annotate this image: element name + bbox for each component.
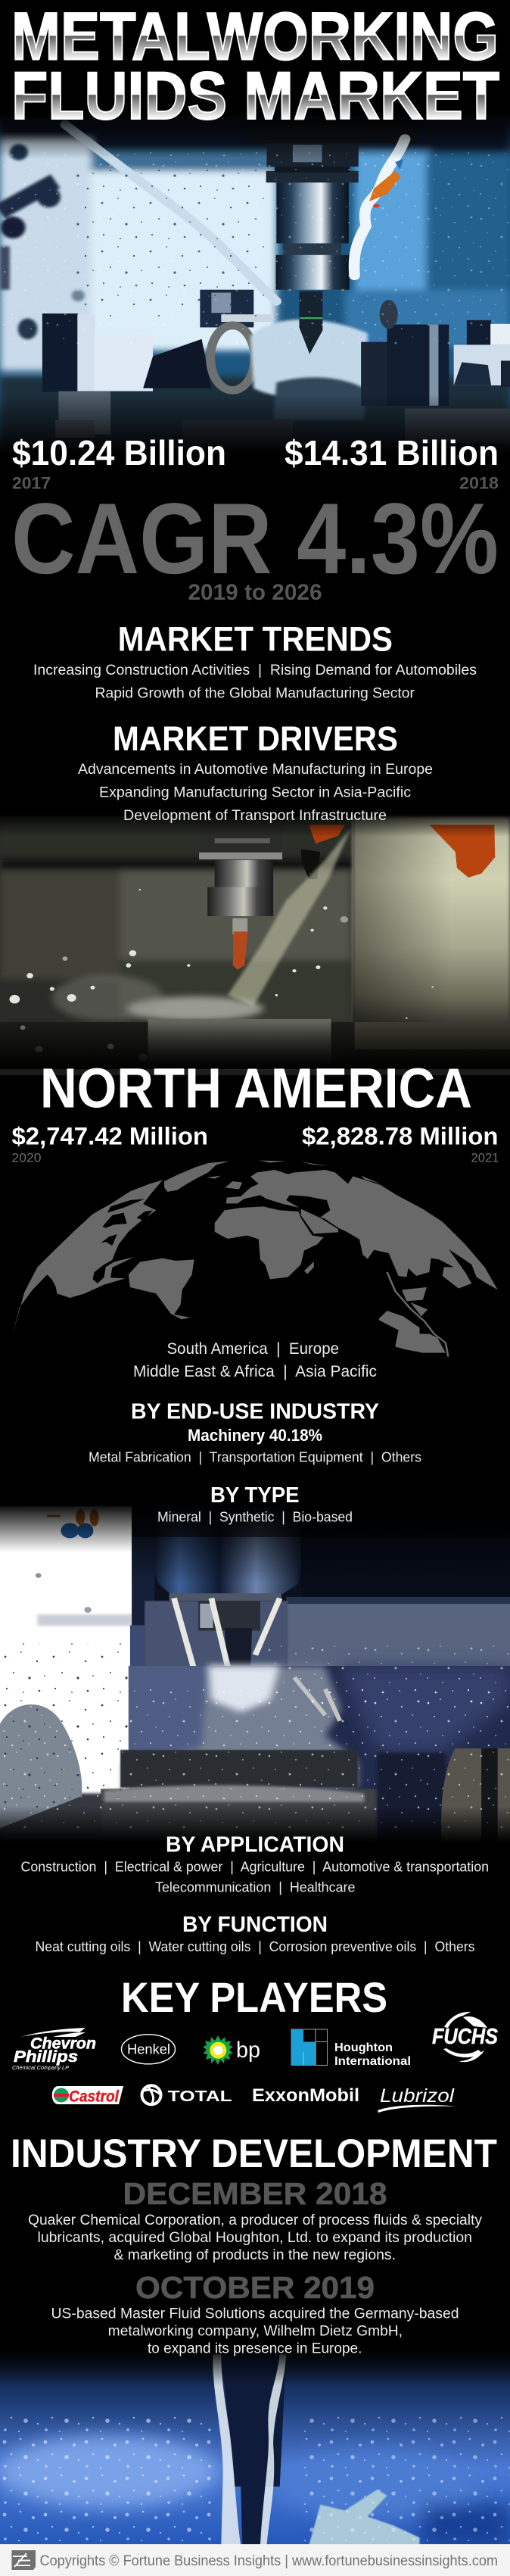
stat: 2017 market size: $10.24 Billion bbox=[12, 433, 226, 472]
title bbox=[11, 0, 499, 133]
logo: Chevron Phillips: Chemical Company LP bbox=[12, 2064, 69, 2071]
development: October 2019: to expand its presence in Europe. bbox=[148, 2341, 362, 2357]
key players heading: KEY PLAYERS bbox=[121, 1973, 387, 2021]
logo: ExxonMobil: ExxonMobil bbox=[252, 2085, 359, 2106]
logo: FUCHS bbox=[432, 2012, 499, 2062]
stat: 2017 market size bbox=[12, 433, 226, 493]
logo: TOTAL: TOTAL bbox=[168, 2088, 232, 2105]
by application: Telecommunication | Healthcare bbox=[155, 1879, 356, 1895]
footer bar bbox=[0, 2544, 510, 2576]
logo: Houghton International: Houghton bbox=[334, 2041, 393, 2054]
development: December 2018 bbox=[28, 2176, 482, 2263]
by type: Mineral | Synthetic | Bio-based bbox=[157, 1510, 353, 1525]
by function: BY FUNCTION bbox=[182, 1913, 328, 1937]
logo: Chevron Phillips: Chevron bbox=[30, 2035, 96, 2053]
market drivers: Expanding Manufacturing Sector in Asia-Pacific bbox=[99, 784, 411, 800]
by end-use industry bbox=[89, 1399, 421, 1464]
development: October 2019 bbox=[51, 2270, 459, 2357]
development: December 2018: Quaker Chemical Corporation, a producer of process fluids & specialty bbox=[28, 2213, 482, 2228]
development: December 2018: lubricants, acquired Global Houghton, Ltd. to expand its production bbox=[38, 2230, 472, 2246]
CAGR figure: 2019 to 2026 bbox=[188, 580, 322, 605]
world map globe bbox=[12, 1161, 498, 1357]
logo: Chevron Phillips: Phillips bbox=[14, 2048, 78, 2066]
by end-use industry: Metal Fabrication | Transportation Equipment | Others bbox=[89, 1449, 421, 1464]
hero photo: milling spindle with coolant in blue tones bbox=[0, 114, 510, 473]
logo: bp bbox=[203, 2035, 260, 2065]
logo: Lubrizol: Lubrizol bbox=[380, 2085, 456, 2107]
by type: BY TYPE bbox=[210, 1483, 300, 1508]
development: December 2018: & marketing of products in the new regions. bbox=[114, 2247, 396, 2263]
market trends: Increasing Construction Activities | Rising Demand for Automobiles bbox=[33, 663, 477, 678]
icon: Fortune Business Insights logo bbox=[12, 2550, 36, 2570]
market trends: MARKET TRENDS bbox=[118, 620, 393, 659]
logo: Castrol: Castrol bbox=[69, 2088, 120, 2105]
by end-use industry: BY END-USE INDUSTRY bbox=[131, 1399, 379, 1424]
logo: Castrol bbox=[52, 2086, 123, 2105]
stat: 2017 market size: 2017 bbox=[12, 474, 51, 493]
logo: Henkel: Henkel bbox=[127, 2042, 170, 2057]
footer bar: Copyrights © Fortune Business Insights | www.fortunebusinessinsights.com bbox=[39, 2553, 498, 2569]
stat: 2021 North America: $2,828.78 Million bbox=[302, 1123, 498, 1150]
logo: Chevron Phillips bbox=[12, 2028, 96, 2071]
logo: Henkel bbox=[121, 2035, 176, 2064]
market trends: Rapid Growth of the Global Manufacturing Sector bbox=[95, 685, 415, 701]
market drivers: Development of Transport Infrastructure bbox=[123, 808, 387, 824]
logo: bp: bp bbox=[236, 2038, 260, 2063]
stat: 2018 market size: $14.31 Billion bbox=[285, 433, 499, 472]
development: October 2019: metalworking company, Wilhelm Dietz GmbH, bbox=[108, 2324, 403, 2340]
stat: 2018 market size: 2018 bbox=[459, 474, 499, 493]
by end-use industry: Machinery 40.18% bbox=[188, 1426, 322, 1445]
photo: end mill with water jet bbox=[0, 810, 510, 1076]
other regions list bbox=[133, 1340, 377, 1380]
logo: FUCHS: FUCHS bbox=[432, 2025, 499, 2049]
by application: Construction | Electrical & power | Agriculture | Automotive & transportation bbox=[21, 1859, 489, 1874]
stat: 2021 North America: 2021 bbox=[471, 1151, 499, 1165]
logo: TOTAL bbox=[142, 2085, 232, 2105]
logo: Houghton International: International bbox=[334, 2055, 411, 2068]
other regions list: South America | Europe bbox=[166, 1340, 339, 1358]
region headline: North America: NORTH AMERICA bbox=[40, 1057, 472, 1119]
logo: Lubrizol bbox=[378, 2085, 457, 2113]
development: October 2019: OCTOBER 2019 bbox=[135, 2270, 375, 2305]
by type bbox=[157, 1483, 353, 1525]
other regions list: Middle East & Africa | Asia Pacific bbox=[133, 1363, 377, 1380]
photo: spindle with spray in blue tones bbox=[0, 1503, 510, 1851]
market trends bbox=[33, 620, 477, 701]
by function bbox=[35, 1913, 475, 1954]
stat: 2020 North America bbox=[12, 1123, 208, 1165]
by application: BY APPLICATION bbox=[166, 1832, 344, 1857]
by application bbox=[21, 1832, 489, 1895]
market drivers: Advancements in Automotive Manufacturing in Europe bbox=[78, 762, 433, 778]
market drivers: MARKET DRIVERS bbox=[113, 719, 398, 758]
stat: 2021 North America bbox=[302, 1123, 499, 1165]
stat: 2020 North America: $2,747.42 Million bbox=[12, 1123, 208, 1150]
development: October 2019: US-based Master Fluid Solutions acquired the Germany-based bbox=[51, 2306, 459, 2322]
photo: drill with blue sparkling coolant bbox=[0, 2347, 510, 2546]
development: December 2018: DECEMBER 2018 bbox=[123, 2176, 387, 2211]
logo: Houghton International bbox=[291, 2029, 411, 2068]
by function: Neat cutting oils | Water cutting oils | Corrosion preventive oils | Others bbox=[35, 1939, 475, 1954]
market drivers bbox=[78, 719, 433, 824]
stat: 2018 market size bbox=[285, 433, 499, 493]
stat: 2020 North America: 2020 bbox=[12, 1151, 41, 1165]
